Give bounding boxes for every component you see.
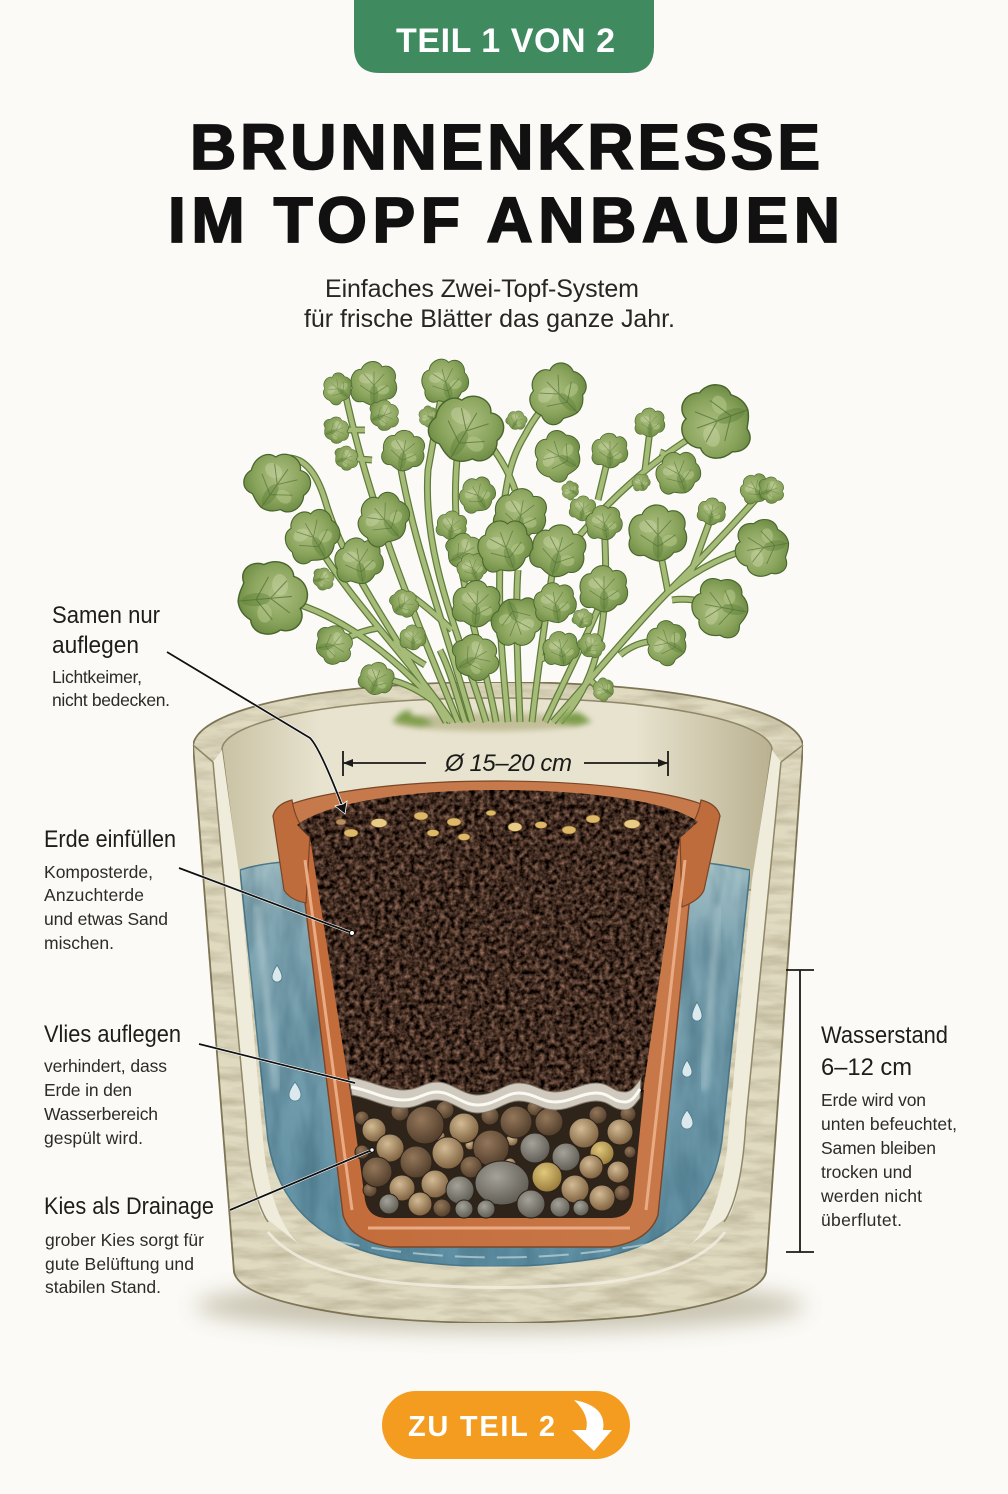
terracotta highlights [305,860,685,1228]
diameter dimension [343,750,668,777]
callout: Wasserstand: Erde wird von [821,1090,926,1110]
badge: Teil 1 von 2 [354,0,654,73]
fleece highlight [351,1087,640,1105]
terracotta back rim [273,781,720,850]
title [168,111,840,256]
callout: Vlies auflegen: verhindert, dass [44,1056,167,1076]
planter body [193,682,803,1323]
callout: Erde einfüllen: Komposterde, [44,862,153,882]
stems [274,392,764,722]
callout: Vlies auflegen [44,1021,355,1148]
callout: Kies als Drainage: Kies als Drainage [44,1193,214,1220]
callout: Samen nur auflegen: Samen nur [52,602,160,629]
water drops [272,965,702,1129]
callout: Wasserstand: Wasserstand [821,1022,948,1049]
callout: Kies als Drainage: gute Belüftung und [45,1254,194,1274]
seeds [336,810,640,840]
callout: Wasserstand: trocken und [821,1162,912,1182]
water level bracket [786,970,814,1252]
icon: curved down arrow [572,1400,612,1451]
callout: Samen nur auflegen: Lichtkeimer, [52,667,142,687]
leader line: soil [179,868,354,936]
callout: Kies als Drainage [44,1148,374,1297]
badge: Teil 1 von 2: TEIL 1 VON 2 [396,22,615,60]
soil [297,790,698,1092]
ground shadow [195,1280,805,1332]
callout: Erde einfüllen: Anzuchterde [44,885,144,905]
title: IM TOPF ANBAUEN [168,184,840,256]
leader line: fleece [199,1044,355,1083]
callout: Wasserstand: Samen bleiben [821,1138,936,1158]
callout: Vlies auflegen: Erde in den [44,1080,132,1100]
cress plant [235,353,793,726]
button: zu Teil 2 [382,1391,630,1459]
callout: Samen nur auflegen: nicht bedecken. [52,690,170,710]
subtitle [304,275,675,333]
planter cut face right [690,750,781,1245]
leader line: gravel [230,1148,374,1210]
planter inner wall edges [193,745,803,1222]
soil residue on back rim [395,713,585,731]
callout: Wasserstand: werden nicht [820,1186,922,1206]
callout: Vlies auflegen: Vlies auflegen [44,1021,181,1048]
callout: Samen nur auflegen [52,602,347,814]
subtitle: für frische Blätter das ganze Jahr. [304,305,675,333]
callout: Wasserstand: überflutet. [821,1210,902,1230]
callout: Vlies auflegen: gespült wird. [44,1128,143,1148]
diameter dimension: Ø 15–20 cm [444,750,572,777]
callout: Vlies auflegen: Wasserbereich [44,1104,158,1124]
callout: Erde einfüllen: Erde einfüllen [44,826,176,853]
callout: Samen nur auflegen: auflegen [52,632,139,659]
outer planter pot cutaway [193,682,803,1323]
callout: Erde einfüllen: und etwas Sand [44,909,168,929]
planter back wall [222,698,772,890]
subtitle: Einfaches Zwei-Topf-System [325,275,639,303]
fleece layer [349,1077,641,1113]
callout: Erde einfüllen: mischen. [44,933,114,953]
callout: Kies als Drainage: stabilen Stand. [45,1277,161,1297]
leader line: seeds [167,652,347,814]
water bottom ripples [330,1240,670,1258]
terracotta inner pot [273,781,720,1247]
planter cut face left [213,750,300,1245]
title: BRUNNENKRESSE [190,111,820,183]
terracotta body [298,845,695,1247]
water highlight left [257,905,276,1090]
moss at base [392,710,592,726]
water highlight right [704,905,718,1090]
callout: Wasserstand [820,1022,957,1230]
terracotta collar right [680,800,720,907]
callout: Kies als Drainage: grober Kies sorgt für [45,1230,204,1250]
callout: Wasserstand: 6–12 cm [821,1054,912,1081]
gravel layer [350,1090,644,1218]
water reservoir [240,860,750,1266]
button: zu Teil 2: ZU TEIL 2 [408,1411,555,1443]
callout: Erde einfüllen [44,826,354,953]
leaves [235,353,793,704]
planter base lip [268,1232,725,1288]
terracotta collar left [273,800,310,903]
callout: Wasserstand: unten befeuchtet, [821,1114,957,1134]
